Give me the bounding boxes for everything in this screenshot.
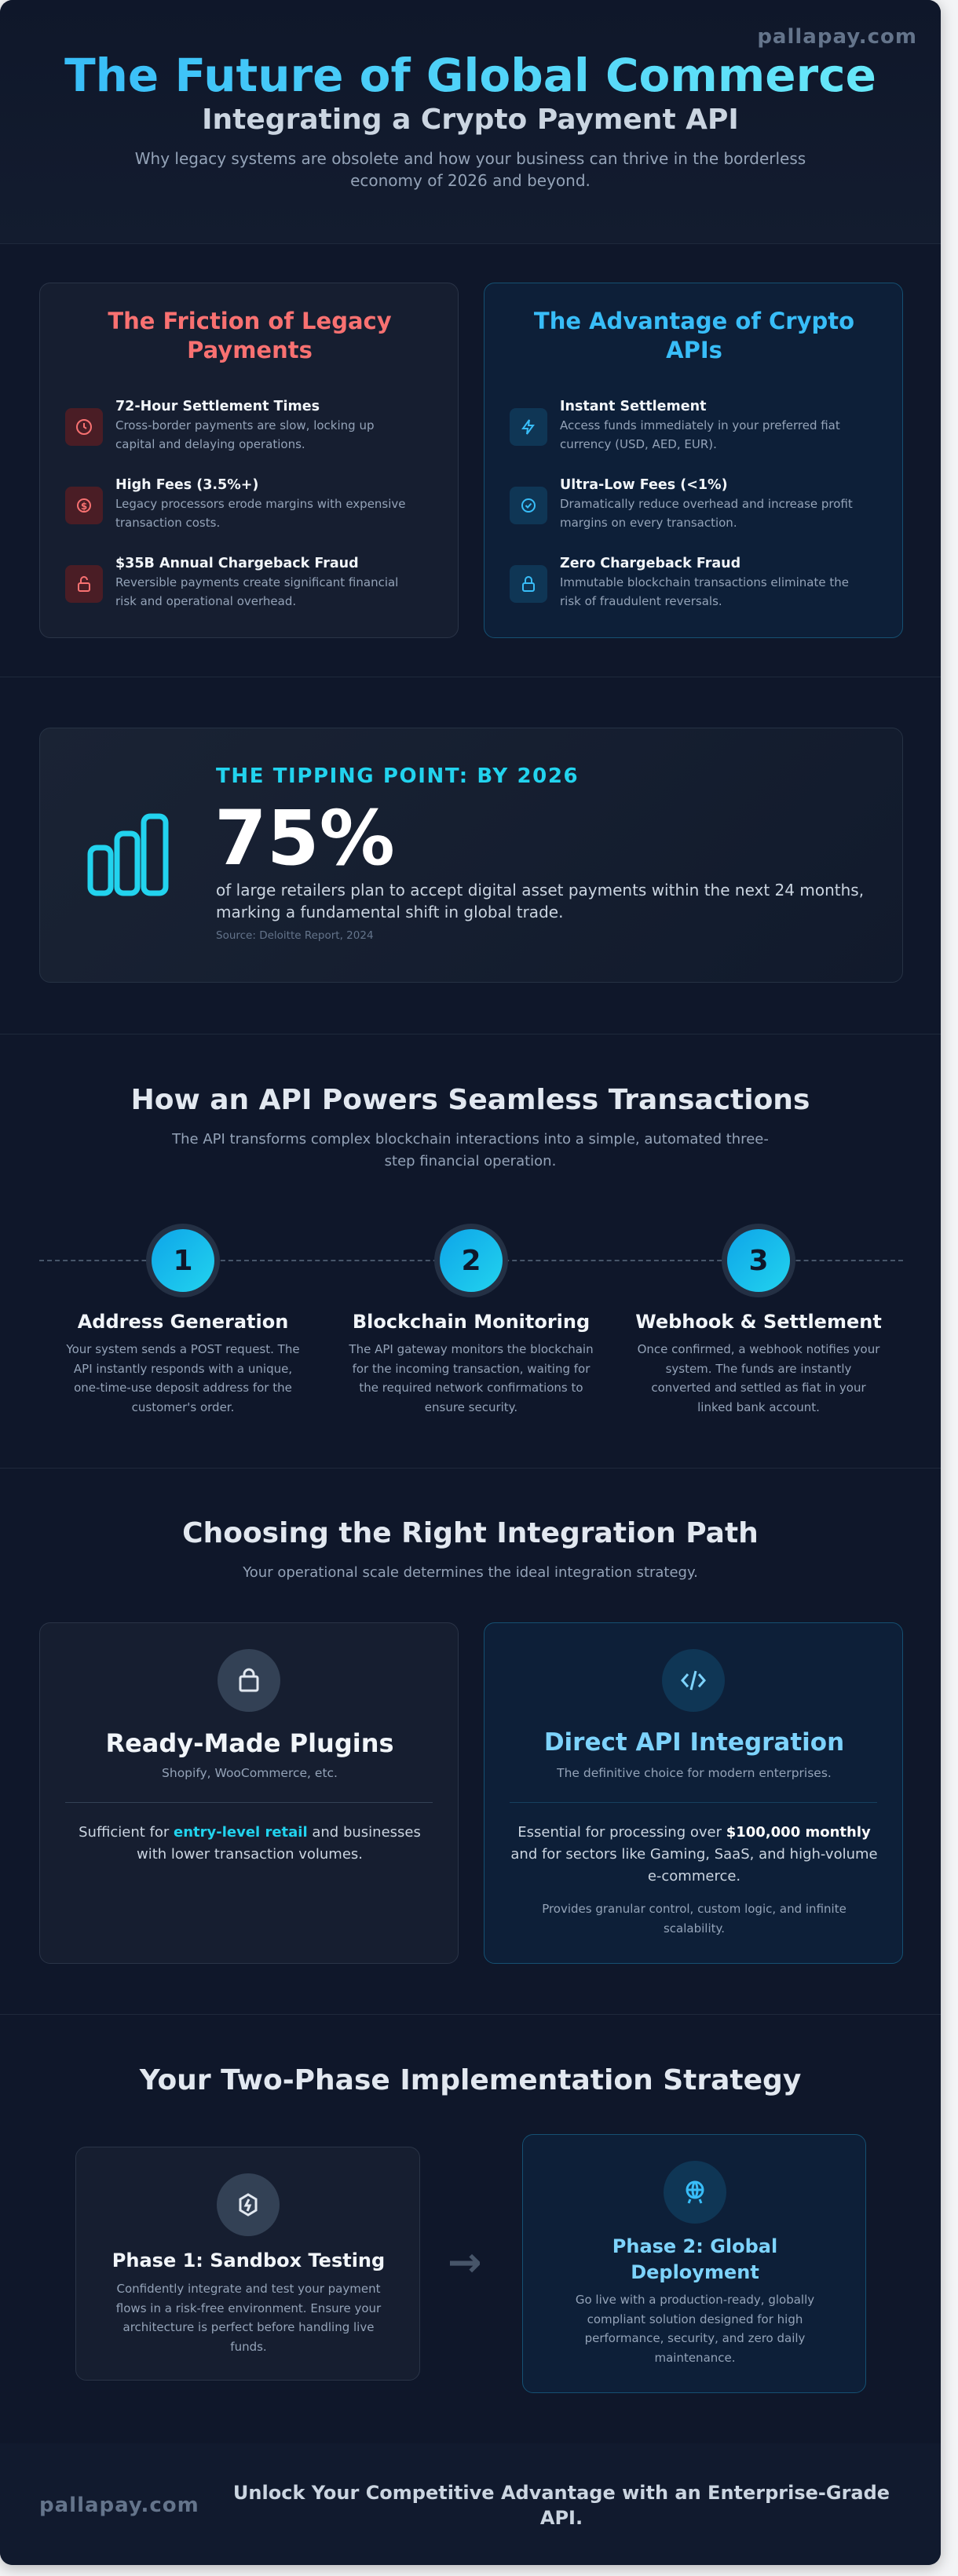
step 2: the required network confirmations to: [359, 1381, 583, 1395]
text: phase 2: [576, 2293, 814, 2364]
title: phase 2: [612, 2235, 777, 2283]
step 3: Once confirmed, a webhook notifies your: [638, 1342, 879, 1356]
heading: crypto: The Advantage of Crypto: [534, 308, 854, 334]
intro text: economy of 2026 and beyond.: [350, 171, 591, 190]
step 2: Blockchain Monitoring: [353, 1311, 590, 1333]
title: The Future of Global Commerce: [64, 49, 876, 102]
step 3: converted and settled as fiat in your: [651, 1381, 866, 1395]
step 2: for the incoming transaction, waiting for: [353, 1361, 590, 1375]
item: fees: High Fees (3.5%+): [115, 477, 258, 493]
source: Source: Deloitte Report, 2024: [216, 929, 374, 942]
item: fees: [65, 477, 406, 530]
icon: bar chart: [88, 813, 168, 896]
note: direct API: scalability.: [664, 1921, 725, 1936]
title: plugins: Ready-Made Plugins: [105, 1728, 394, 1758]
item: low fees: [510, 477, 853, 530]
text: phase 1: [116, 2282, 382, 2353]
footer CTA: API.: [540, 2507, 583, 2529]
stat text: marking a fundamental shift in global trade.: [216, 903, 563, 921]
title: phase 2: Phase 2: Global: [612, 2235, 777, 2257]
step 1: API instantly responds with a unique,: [74, 1361, 292, 1375]
footer CTA: [233, 2482, 890, 2529]
title: phase 2: Deployment: [631, 2261, 759, 2283]
timeline: [39, 1260, 903, 1261]
item: fees: Legacy processors erode margins with expensive: [115, 497, 406, 511]
step 2: [349, 1224, 594, 1414]
step 3: linked bank account.: [697, 1400, 820, 1414]
item: low fees: Dramatically reduce overhead and increase profit: [560, 497, 853, 511]
heading: crypto: APIs: [666, 337, 722, 363]
brand: top right: pallapay.com: [757, 25, 917, 49]
subtext: how: step financial operation.: [385, 1153, 556, 1169]
intro text: [135, 149, 806, 190]
item: fraud: $35B Annual Chargeback Fraud: [115, 556, 359, 571]
title: phase 1: Phase 1: Sandbox Testing: [112, 2249, 385, 2271]
item: settlement: 72-Hour Settlement Times: [115, 399, 320, 414]
heading: two-phase: Your Two-Phase Implementation Strategy: [140, 2064, 801, 2096]
step 1: one-time-use deposit address for the: [74, 1381, 292, 1395]
step 2: The API gateway monitors the blockchain: [349, 1342, 594, 1356]
text: phase 1: funds.: [230, 2339, 267, 2353]
heading: legacy: The Friction of Legacy: [108, 308, 392, 334]
item: instant: [510, 399, 840, 451]
text: phase 2: performance, security, and zero daily: [585, 2331, 805, 2345]
step 3: Webhook & Settlement: [635, 1311, 882, 1333]
panel: tipping point stat: [39, 728, 903, 983]
text: phase 2: maintenance.: [654, 2350, 736, 2364]
text: direct API: [510, 1824, 878, 1885]
item: zero fraud: Zero Chargeback Fraud: [560, 556, 740, 571]
step 2: 2: [461, 1245, 481, 1276]
item: low fees: margins on every transaction.: [560, 516, 737, 530]
header background: [0, 0, 941, 243]
item: fees: $: [81, 501, 87, 512]
item: low fees: Ultra-Low Fees (<1%): [560, 477, 728, 493]
heading: integration path: Choosing the Right Integration Path: [182, 1517, 759, 1549]
text: direct API: Essential for processing over $100,000 monthly: [517, 1824, 871, 1841]
heading: crypto: [534, 308, 854, 363]
item: fraud: risk and operational overhead.: [115, 594, 296, 608]
step 1: [66, 1224, 300, 1414]
icon: shopping bag: [218, 1649, 280, 1712]
text: phase 2: compliant solution designed for high: [587, 2312, 803, 2326]
step 1: Your system sends a POST request. The: [66, 1342, 300, 1356]
item: instant: currency (USD, AED, EUR).: [560, 437, 717, 451]
step 3: [635, 1224, 882, 1414]
note: direct API: Provides granular control, custom logic, and infinite: [542, 1902, 846, 1916]
heading: legacy: [108, 308, 392, 363]
item: zero fraud: risk of fraudulent reversals.: [560, 594, 722, 608]
text: phase 1: Confidently integrate and test your payment: [116, 2282, 380, 2296]
panel: direct API: [484, 1622, 903, 1964]
stat number: 75%: [214, 794, 395, 882]
item: zero fraud: Immutable blockchain transactions eliminate the: [560, 575, 849, 589]
text: plugins: Sufficient for entry-level retail and businesses: [79, 1824, 421, 1841]
panel: plugins: [39, 1622, 459, 1964]
panel: legacy friction: [39, 283, 459, 638]
icon: globe: [664, 2161, 726, 2224]
stat text: of large retailers plan to accept digital asset payments within the next 24 months,: [216, 881, 864, 899]
heading: legacy: Payments: [187, 337, 313, 363]
item: settlement: capital and delaying operations.: [115, 437, 305, 451]
footer brand: pallapay.com: [39, 2494, 199, 2517]
subtitle: plugins: Shopify, WooCommerce, etc.: [162, 1766, 338, 1780]
panel: crypto advantage: [484, 283, 903, 638]
step 3: system. The funds are instantly: [666, 1361, 851, 1375]
text: phase 2: Go live with a production-ready, globally: [576, 2293, 814, 2307]
text: phase 1: flows in a risk-free environment. Ensure your: [116, 2301, 381, 2315]
stat text: [216, 881, 864, 921]
intro text: Why legacy systems are obsolete and how your business can thrive in the borderless: [135, 149, 806, 168]
footer CTA: Unlock Your Competitive Advantage with an Enterprise-Grade: [233, 2482, 890, 2504]
subtext: how: The API transforms complex blockchain interactions into a simple, automated three-: [172, 1131, 769, 1148]
step 2: ensure security.: [425, 1400, 517, 1414]
arrow: →: [448, 2239, 482, 2286]
item: settlement: [65, 399, 374, 451]
text: phase 1: architecture is perfect before handling live: [123, 2320, 374, 2334]
text: plugins: [79, 1824, 421, 1863]
step 1: Address Generation: [78, 1311, 288, 1333]
item: fraud: [65, 556, 398, 608]
text: direct API: and for sectors like Gaming, SaaS, and high-volume: [510, 1846, 878, 1863]
item: fees: transaction costs.: [115, 516, 220, 530]
panel: phase 1: [75, 2147, 420, 2381]
stat label: THE TIPPING POINT: BY 2026: [216, 764, 579, 788]
item: instant: Instant Settlement: [560, 399, 706, 414]
item: settlement: Cross-border payments are slow, locking up: [115, 418, 374, 432]
item: fraud: Reversible payments create significant financial: [115, 575, 398, 589]
step 1: 1: [173, 1245, 193, 1276]
text: plugins: with lower transaction volumes.: [137, 1846, 363, 1863]
text: direct API: e-commerce.: [648, 1868, 740, 1885]
subtitle: Integrating a Crypto Payment API: [202, 104, 739, 136]
subtext: integration: Your operational scale determines the ideal integration strategy.: [243, 1564, 698, 1581]
title: direct API: Direct API Integration: [544, 1728, 844, 1757]
panel: phase 2: [522, 2134, 866, 2393]
step 3: 3: [748, 1245, 769, 1276]
icon: code: [662, 1649, 725, 1712]
subtitle: direct API: The definitive choice for modern enterprises.: [557, 1766, 832, 1780]
note: direct API: [542, 1902, 846, 1936]
subtext: how: [172, 1131, 769, 1169]
icon: sandbox: [217, 2173, 280, 2236]
item: zero fraud: [510, 556, 849, 608]
heading: how API works: How an API Powers Seamless Transactions: [131, 1084, 810, 1116]
footer: [0, 2443, 941, 2565]
item: instant: Access funds immediately in your preferred fiat: [560, 418, 840, 432]
step 1: customer's order.: [132, 1400, 234, 1414]
